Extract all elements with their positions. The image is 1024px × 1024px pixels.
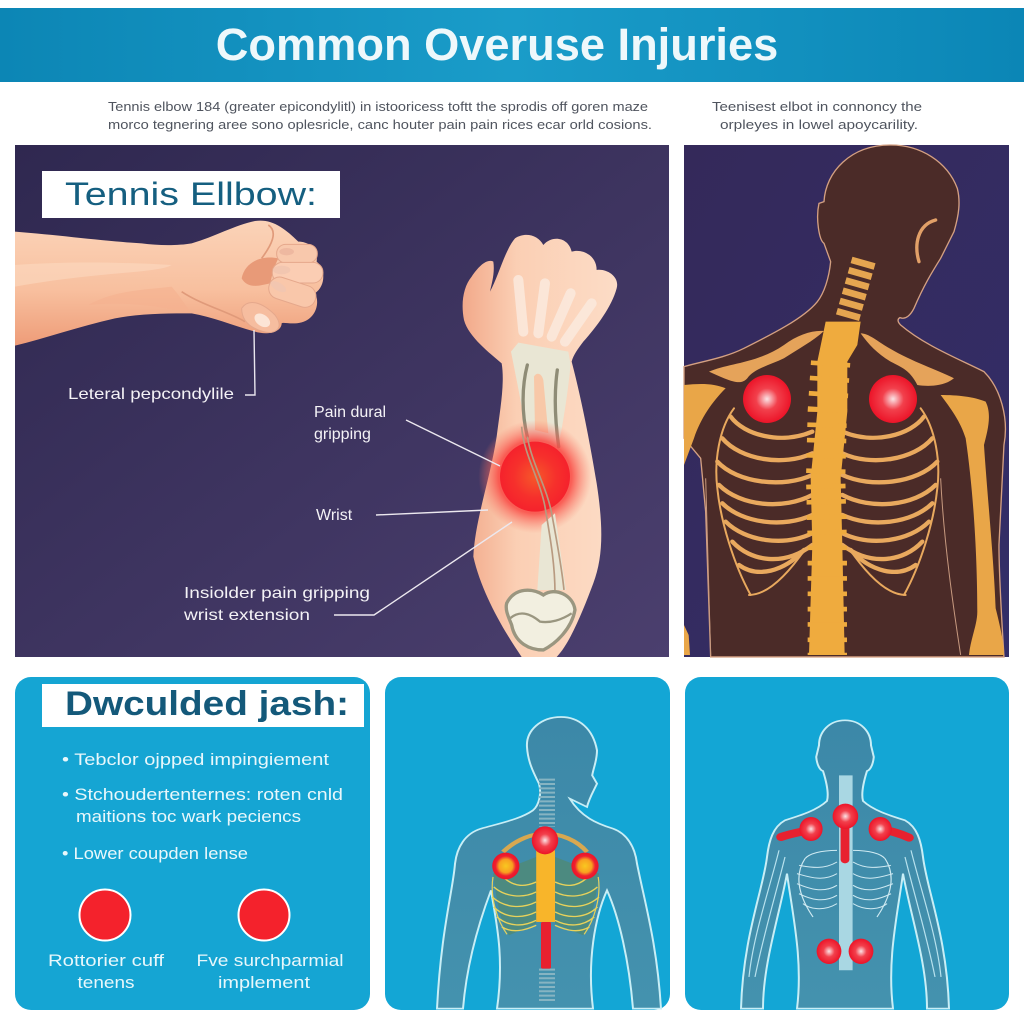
label: pain during gripping: Pain dural <box>314 404 386 421</box>
panel: back figure with ribs <box>385 677 670 1010</box>
illustration: forearm with bones <box>463 235 617 657</box>
pain marker: right shoulder <box>869 375 917 423</box>
illustration: clavicles and arm bones <box>684 331 1004 655</box>
pain marker: neck <box>532 826 558 854</box>
illustration: body silhouette <box>437 717 661 1009</box>
illustration: ear <box>917 220 936 262</box>
illustration: ribs <box>492 834 599 935</box>
bullet list <box>62 751 343 863</box>
illustration: spine <box>829 775 863 970</box>
bullet list: • Lower coupden lense <box>62 845 248 863</box>
panel: shoulder list <box>15 677 370 1010</box>
pain marker: top spine <box>833 804 858 829</box>
illustration: upper and lower vertebrae <box>527 779 567 1002</box>
bullet list: maitions toc wark peciencs <box>76 808 301 826</box>
label: wrist <box>316 507 488 524</box>
figure: side-facing back with yellow ribs <box>437 717 661 1009</box>
pain marker: lower left <box>817 939 841 964</box>
panel: back figure with markers <box>685 677 1009 1010</box>
label: lateral epicondyle: Leteral pepcondylile <box>68 386 234 403</box>
illustration: spine <box>809 260 864 655</box>
title: Common Overuse Injuries <box>216 19 778 70</box>
illustration: torso silhouette <box>684 145 1005 657</box>
label: supraspinatus impingement <box>196 952 344 992</box>
illustration: ribs <box>797 850 893 917</box>
label: shoulder pain gripping wrist extension: wrist extension <box>183 607 310 624</box>
illustration: arm bones <box>749 850 941 977</box>
label: shoulder pain gripping wrist extension <box>183 522 512 624</box>
header banner <box>0 8 1024 82</box>
illustration: red pain lines <box>781 817 909 860</box>
intro text right: orpleyes in lowel apoycarility. <box>720 117 918 132</box>
panel: back figures <box>385 677 1009 1010</box>
heading: shoulder: Dwculded jash: <box>65 685 349 723</box>
label: shoulder pain gripping wrist extension: Insiolder pain gripping <box>184 585 370 602</box>
illustration: body silhouette <box>741 720 949 1009</box>
label: pain during gripping <box>314 404 500 466</box>
intro text left: Tennis elbow 184 (greater epicondylitl) in istooricess toftt the sprodis off goren maze <box>108 99 648 114</box>
label: pain during gripping: gripping <box>314 426 371 443</box>
illustration: ribs <box>716 408 938 595</box>
bullet list: • Tebclor ojpped impingiement <box>62 751 329 769</box>
label: lateral epicondyle <box>68 330 255 403</box>
intro text left <box>108 99 652 132</box>
icon: rotator cuff marker <box>80 890 130 940</box>
label: wrist: Wrist <box>316 507 353 524</box>
illustration: spine <box>536 850 555 922</box>
illustration: outstretched arm and fist <box>15 221 323 346</box>
figure: rear-facing back with markers <box>741 720 949 1009</box>
heading: tennis elbow <box>42 171 340 218</box>
pain marker: left shoulder <box>799 817 823 841</box>
heading: tennis elbow: Tennis Ellbow: <box>65 176 317 212</box>
label: rotator cuff tendons: tenens <box>78 974 134 992</box>
label: rotator cuff tendons <box>48 952 165 992</box>
intro text left: morco tegnering aree sono oplesricle, canc houter pain pain rices ecar orld cosions. <box>108 117 652 132</box>
icon: impingement marker <box>238 890 290 940</box>
pain marker: right shoulder <box>571 853 599 879</box>
illustration: lower spine pain bar <box>541 922 551 969</box>
intro text right: Teenisest elbot in connoncy the <box>712 99 922 114</box>
label: rotator cuff tendons: Rottorier cuff <box>48 952 165 970</box>
pain marker: right shoulder <box>869 817 892 841</box>
pain marker: lower right <box>849 939 873 964</box>
intro text right <box>712 99 922 132</box>
pain marker: left shoulder <box>743 375 791 423</box>
pain marker: left shoulder <box>492 853 519 879</box>
panel: back skeleton <box>684 145 1009 657</box>
bullet list: • Stchoudertenternes: roten cnld <box>62 786 343 804</box>
heading: shoulder <box>42 684 364 727</box>
label: supraspinatus impingement: implement <box>218 974 310 992</box>
panel: tennis elbow <box>15 145 669 657</box>
label: supraspinatus impingement: Fve surchparmial <box>196 952 344 970</box>
